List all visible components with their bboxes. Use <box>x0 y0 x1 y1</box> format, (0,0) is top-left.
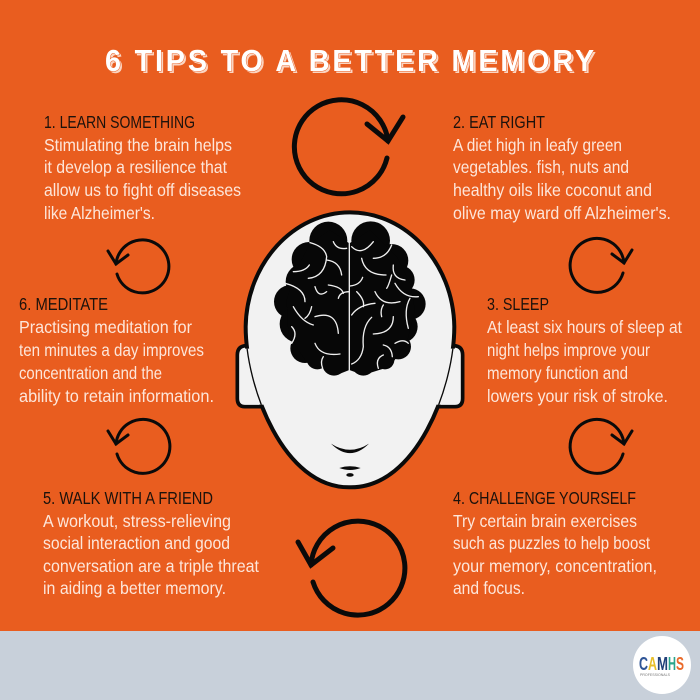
tip 5: walk with a friend: 5. WALK WITH A FRIEND <box>43 488 213 508</box>
tip 4: challenge yourself: 4. CHALLENGE YOURSELF <box>453 488 636 508</box>
head edge over ears <box>245 348 455 405</box>
left ear <box>237 346 267 407</box>
tip 3: sleep: At least six hours of sleep at <box>487 317 682 337</box>
tip 3: sleep: lowers your risk of stroke. <box>487 386 668 406</box>
tip 5: walk with a friend: conversation are a triple threat <box>43 556 259 576</box>
arrow: left lower cycle <box>108 419 170 473</box>
tip 3: sleep: memory function and <box>487 363 628 383</box>
tip 6: meditate: concentration and the <box>19 363 162 383</box>
head outline <box>246 212 454 487</box>
tip 4: challenge yourself: and focus. <box>453 578 525 598</box>
logo: CAMHS: M <box>657 654 668 674</box>
tip 6: meditate: ten minutes a day improves <box>19 340 204 360</box>
tip 2: eat right: A diet high in leafy green <box>453 135 622 155</box>
logo: CAMHS: A <box>648 654 657 674</box>
tip 5: walk with a friend <box>43 488 259 598</box>
logo: CAMHS: S <box>676 654 684 674</box>
tip 5: walk with a friend: in aiding a better memory. <box>43 578 226 598</box>
logo: CAMHS: PROFESSIONALS <box>640 672 670 677</box>
tip 1: learn something: it develop a resilience that <box>44 157 227 177</box>
tip 3: sleep: night helps improve your <box>487 340 650 360</box>
tip 3: sleep <box>487 294 682 406</box>
tip 1: learn something: allow us to fight off diseases <box>44 180 241 200</box>
title: 6 TIPS TO A BETTER MEMORY <box>107 46 599 80</box>
arrow: top large cycle <box>294 100 403 194</box>
chin dot <box>346 473 354 477</box>
lower lip <box>339 466 361 470</box>
tip 3: sleep: 3. SLEEP <box>487 294 549 314</box>
head illustration <box>237 212 463 487</box>
tip 2: eat right: healthy oils like coconut and <box>453 180 652 200</box>
tip 5: walk with a friend: A workout, stress-relieving <box>43 511 231 531</box>
arrow: right lower cycle <box>570 419 632 473</box>
chin crease <box>331 444 369 453</box>
footer band <box>0 631 700 700</box>
tip 4: challenge yourself: such as puzzles to help boost <box>453 533 650 553</box>
tip 5: walk with a friend: social interaction and good <box>43 533 230 553</box>
tip 1: learn something: 1. LEARN SOMETHING <box>44 112 195 132</box>
logo: CAMHS <box>633 636 691 694</box>
logo: CAMHS: H <box>668 654 676 674</box>
tip 1: learn something: Stimulating the brain helps <box>44 135 232 155</box>
tip 4: challenge yourself: your memory, concentration, <box>453 556 657 576</box>
title: 6 TIPS TO A BETTER MEMORY <box>105 44 597 78</box>
arrow: right upper cycle <box>570 238 632 292</box>
logo: CAMHS: C <box>639 654 648 674</box>
tip 2: eat right: olive may ward off Alzheimer's. <box>453 203 671 223</box>
tip 6: meditate <box>19 294 214 406</box>
tip 6: meditate: Practising meditation for <box>19 317 192 337</box>
tip 1: learn something <box>44 112 241 223</box>
tip 6: meditate: 6. MEDITATE <box>19 294 108 314</box>
tip 2: eat right <box>453 112 671 223</box>
arrow: bottom large cycle <box>298 521 405 615</box>
right ear <box>433 346 463 407</box>
arrow: left upper cycle <box>108 240 169 293</box>
tip 4: challenge yourself <box>453 488 657 598</box>
tip 2: eat right: vegetables. fish, nuts and <box>453 157 629 177</box>
brain <box>274 221 426 376</box>
tip 6: meditate: ability to retain information. <box>19 386 214 406</box>
tip 1: learn something: like Alzheimer's. <box>44 203 155 223</box>
tip 2: eat right: 2. EAT RIGHT <box>453 112 545 132</box>
tip 4: challenge yourself: Try certain brain exercises <box>453 511 637 531</box>
